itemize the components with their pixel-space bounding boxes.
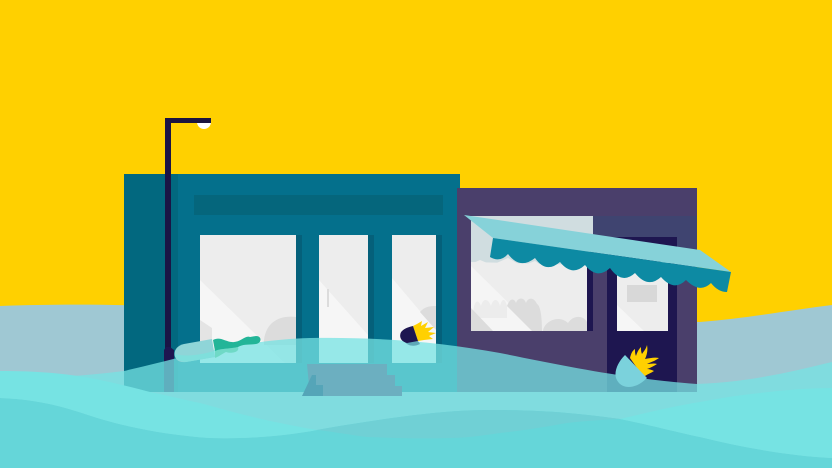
pot waterline shadow: [405, 341, 420, 346]
awning top: [464, 215, 731, 272]
lamp arm: [165, 118, 211, 123]
dark door: [607, 237, 677, 392]
bottle body: [174, 339, 215, 362]
front bright water wave, left: [0, 371, 317, 438]
lamp base: [164, 347, 174, 392]
step shadow: [302, 375, 323, 396]
yellow leaves: [413, 321, 436, 341]
right shop window: [392, 235, 436, 363]
green submerged tint: [215, 347, 238, 358]
purple facade: [457, 188, 697, 392]
green liquid: [213, 336, 260, 351]
shop window: [471, 216, 593, 331]
foreground darker water wave: [0, 398, 832, 468]
upper door panel: [593, 216, 697, 266]
back flood water: [0, 305, 832, 468]
lamp post: [164, 118, 211, 392]
centre glass door: [319, 235, 368, 363]
semi-transparent water over buildings: [0, 338, 832, 468]
shop sign band: [194, 195, 443, 215]
shop facade: [178, 174, 460, 392]
lamp bulb: [197, 122, 211, 129]
door window: [617, 262, 668, 331]
front bright water wave, right: [620, 388, 832, 458]
awning scalloped valance: [490, 238, 731, 292]
lamp pole: [165, 118, 171, 350]
window shadows: [296, 235, 442, 363]
floating bottle: [174, 336, 260, 362]
building: teal shop: [124, 174, 460, 392]
submerged steps: [302, 364, 402, 396]
left shop window: [200, 235, 296, 363]
building: purple shop: [457, 188, 697, 392]
bottle submerged tint: [175, 351, 215, 362]
large floating plant: [615, 345, 659, 387]
striped awning: [464, 215, 731, 292]
teal pot: [615, 355, 647, 387]
small floating plant: [400, 321, 436, 346]
window shadow: [587, 255, 593, 331]
shop side wall: [124, 174, 178, 392]
yellow leaves: [630, 345, 659, 376]
dark pot: [400, 326, 418, 343]
water overlap lens: [317, 410, 620, 438]
